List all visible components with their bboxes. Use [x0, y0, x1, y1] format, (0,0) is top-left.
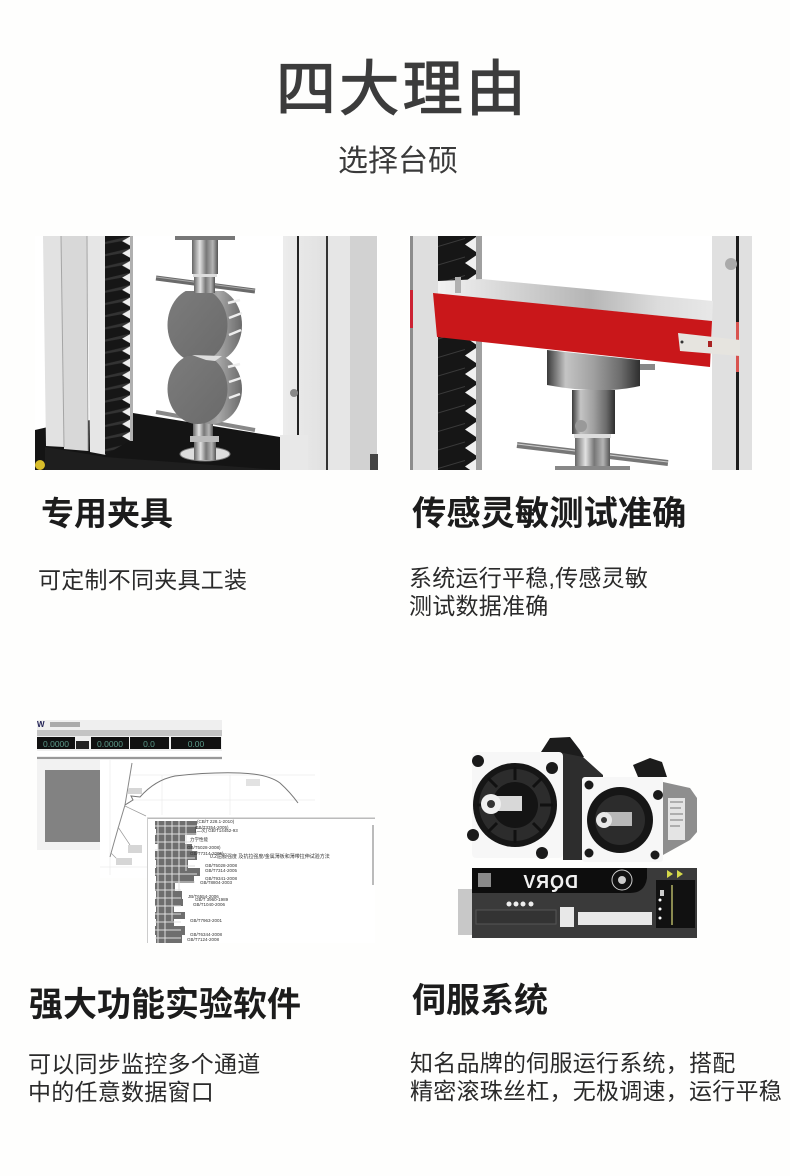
standards list window: GB/T9341-2008	[205, 876, 238, 881]
title: 四大理由	[276, 56, 529, 123]
text: software: 中的任意数据窗口	[28, 1079, 214, 1105]
text: servo: 精密滚珠丝杠，无极调速，运行平稳	[410, 1078, 782, 1104]
heading: servo: 伺服系统	[412, 982, 548, 1020]
standards list window: 0.2屈服强度 及抗拉强度/金属薄板和薄带拉伸试验方法	[210, 853, 330, 860]
heading: software: 强大功能实验软件	[29, 986, 301, 1024]
standards list window: GB/T1040-2006	[193, 902, 226, 907]
text: software: 可以同步监控多个通道	[28, 1051, 260, 1077]
right column	[283, 236, 377, 470]
standards list window: GB/T7314-2005	[205, 868, 238, 873]
rack and rear strip	[438, 236, 476, 470]
text: sensing: 测试数据准确	[409, 593, 548, 619]
standards list window: GB/T7314-2005)	[190, 851, 224, 856]
standards list window: GB/T7124-2008	[187, 937, 220, 942]
standards list window	[147, 818, 375, 943]
standards list window: GB/T6344-2008	[190, 932, 223, 937]
left column	[43, 236, 64, 447]
standards list window: (二次) GB/T14452-93	[195, 827, 238, 834]
grip and handles	[156, 236, 255, 461]
servo drive: DQRV	[522, 872, 578, 892]
standards list window: (CB/T 228.1-2010)	[197, 819, 235, 824]
crossbeam	[433, 277, 740, 372]
large motor	[467, 737, 603, 860]
standards list window: JB/T6554-2006	[188, 894, 219, 899]
stress curve chart	[100, 760, 320, 878]
text: software	[28, 1051, 260, 1105]
app window: W	[37, 720, 45, 729]
standards list window: 力学性能	[190, 836, 208, 843]
heading: fixtures: 专用夹具	[41, 495, 173, 532]
panel: software screenshot	[37, 720, 375, 943]
load cell and grip	[517, 350, 668, 470]
panel: servo motors photo	[458, 737, 697, 938]
standards list window: GB/T 3960-1989	[195, 897, 229, 902]
text: sensing: 系统运行平稳,传感灵敏	[409, 565, 648, 591]
text: servo	[410, 1050, 782, 1104]
heading: sensing: 传感灵敏测试准确	[412, 495, 686, 533]
standards list window: GB/T7963-2001	[190, 918, 223, 923]
right column	[712, 236, 752, 470]
subtitle: 选择台硕	[338, 145, 458, 178]
standards list window: GB/T5028-2008)	[187, 845, 221, 850]
text: fixtures: 可定制不同夹具工装	[38, 567, 247, 593]
discs	[168, 280, 242, 424]
base table	[35, 413, 280, 470]
panel: sensor photo	[410, 236, 752, 470]
app window: 0.0000	[43, 739, 69, 749]
servo drive	[458, 868, 697, 938]
standards list window: GB/T5028-2008	[205, 863, 238, 868]
app window: 0.0	[143, 739, 155, 749]
text: servo: 知名品牌的伺服运行系统，搭配	[410, 1050, 736, 1076]
panel: fixture photo	[35, 236, 378, 470]
left column	[410, 236, 438, 470]
app window: 0.0000	[97, 739, 123, 749]
standards list window: GB/T8804-2003	[200, 880, 233, 885]
standards list window: GB/T3354-2005)	[195, 825, 229, 830]
app window: 0.00	[188, 739, 205, 749]
text: sensing	[409, 565, 648, 619]
small motor	[582, 758, 697, 862]
app window	[37, 720, 222, 850]
